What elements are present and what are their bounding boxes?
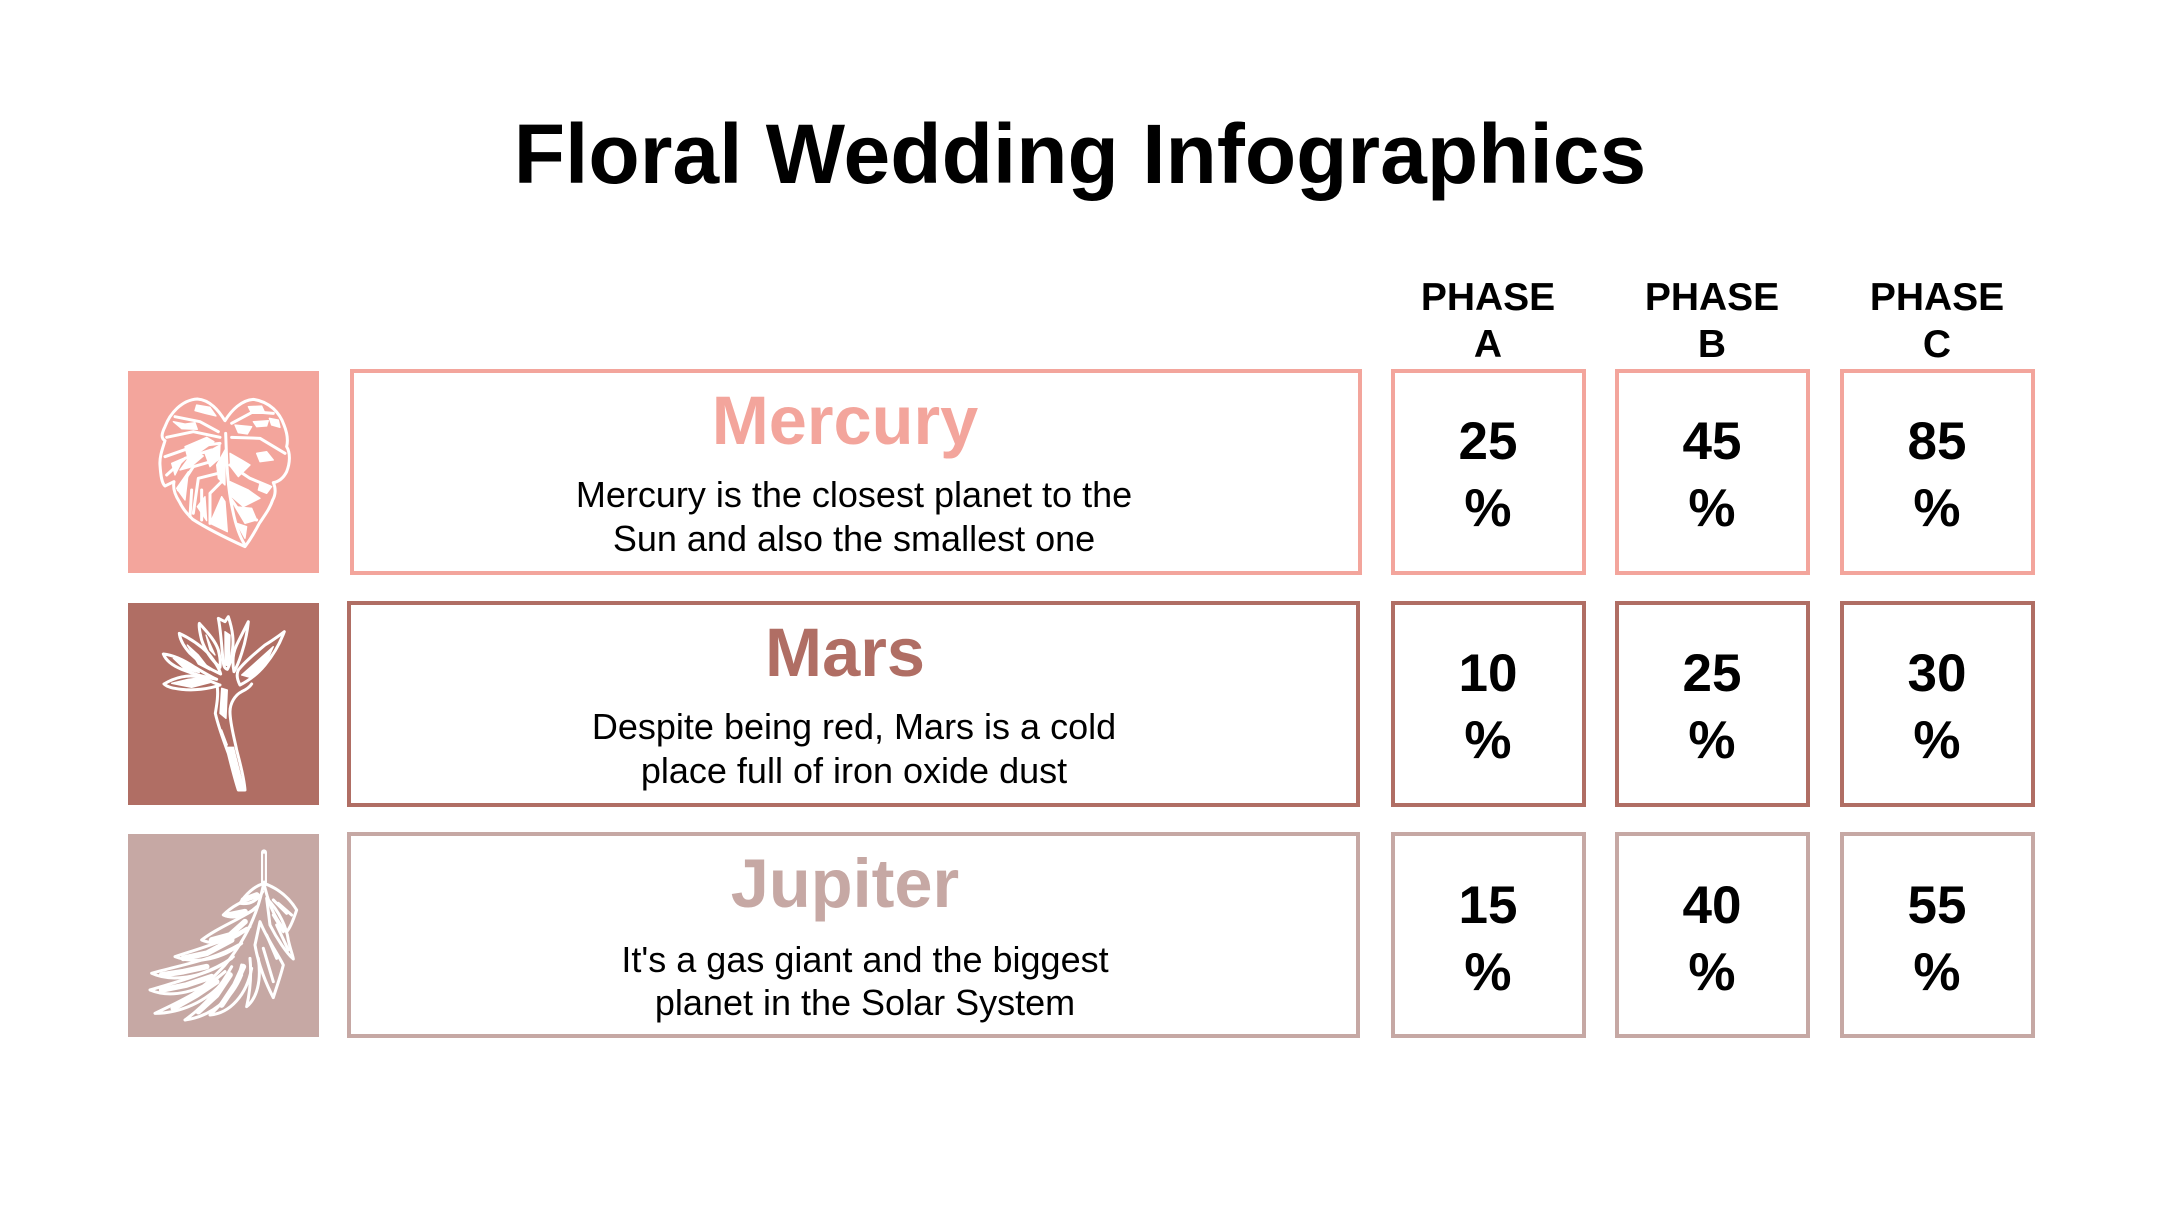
value: Mercury phase C: % (1913, 479, 1961, 538)
icon: feathered leaf (128, 834, 319, 1037)
column heading: phase A: PHASE (1421, 276, 1555, 319)
value: Mars phase C: % (1913, 711, 1961, 770)
text frame: Mars: place full of iron oxide dust (641, 750, 1067, 791)
value: Mercury phase A: 25 (1459, 412, 1517, 471)
value: Mars phase B (1617, 603, 1808, 805)
text frame: Jupiter: planet in the Solar System (655, 982, 1075, 1023)
text frame: Mars: Despite being red, Mars is a cold (592, 706, 1116, 747)
value: Mars phase B: 25 (1683, 644, 1741, 703)
value: Mercury phase B (1617, 371, 1808, 573)
icon: bird of paradise flower (128, 603, 319, 805)
value: Jupiter phase A: 15 (1459, 876, 1517, 935)
value: Mercury phase C (1842, 371, 2033, 573)
column heading: phase B: B (1698, 323, 1726, 366)
value: Jupiter phase A: % (1464, 943, 1512, 1002)
value: Mars phase A: 10 (1459, 644, 1517, 703)
value: Jupiter phase B (1617, 834, 1808, 1036)
column heading: phase B (1645, 276, 1779, 366)
text frame: Mars (349, 603, 1358, 805)
text frame: Mercury: Mercury (712, 382, 978, 459)
value: Jupiter phase C: % (1913, 943, 1961, 1002)
column heading: phase C: PHASE (1870, 276, 2004, 319)
value: Mars phase A (1393, 603, 1584, 805)
text frame: Mercury (352, 371, 1360, 573)
text frame: Mercury: Mercury is the closest planet to the (576, 474, 1132, 515)
value: Mars phase C (1842, 603, 2033, 805)
column heading: phase A (1421, 276, 1555, 366)
value: Mars phase B: % (1688, 711, 1736, 770)
column heading: phase C (1870, 276, 2004, 366)
value: Mars phase C: 30 (1908, 644, 1966, 703)
value: Jupiter phase A (1393, 834, 1584, 1036)
value: Jupiter phase B: 40 (1683, 876, 1741, 935)
value: Mercury phase A: % (1464, 479, 1512, 538)
title: Floral Wedding Infographics (514, 107, 1646, 201)
value: Mercury phase B: % (1688, 479, 1736, 538)
column heading: phase A: A (1474, 323, 1502, 366)
column heading: phase B: PHASE (1645, 276, 1779, 319)
text frame: Mercury: Sun and also the smallest one (613, 518, 1095, 559)
row: Mercury (128, 371, 2033, 573)
value: Jupiter phase B: % (1688, 943, 1736, 1002)
value: Mars phase A: % (1464, 711, 1512, 770)
row: Mars (128, 603, 2033, 805)
text frame: Mars: Mars (765, 614, 925, 691)
text frame: Jupiter (349, 834, 1358, 1036)
value: Jupiter phase C: 55 (1908, 876, 1966, 935)
value: Mercury phase C: 85 (1908, 412, 1966, 471)
value: Jupiter phase C (1842, 834, 2033, 1036)
text frame: Jupiter: Jupiter (731, 845, 959, 922)
column heading: phase C: C (1923, 323, 1951, 366)
value: Mercury phase A (1393, 371, 1584, 573)
icon: monstera leaf (128, 371, 319, 573)
value: Mercury phase B: 45 (1683, 412, 1741, 471)
row: Jupiter (128, 834, 2033, 1037)
text frame: Jupiter: It's a gas giant and the biggest (621, 939, 1109, 980)
